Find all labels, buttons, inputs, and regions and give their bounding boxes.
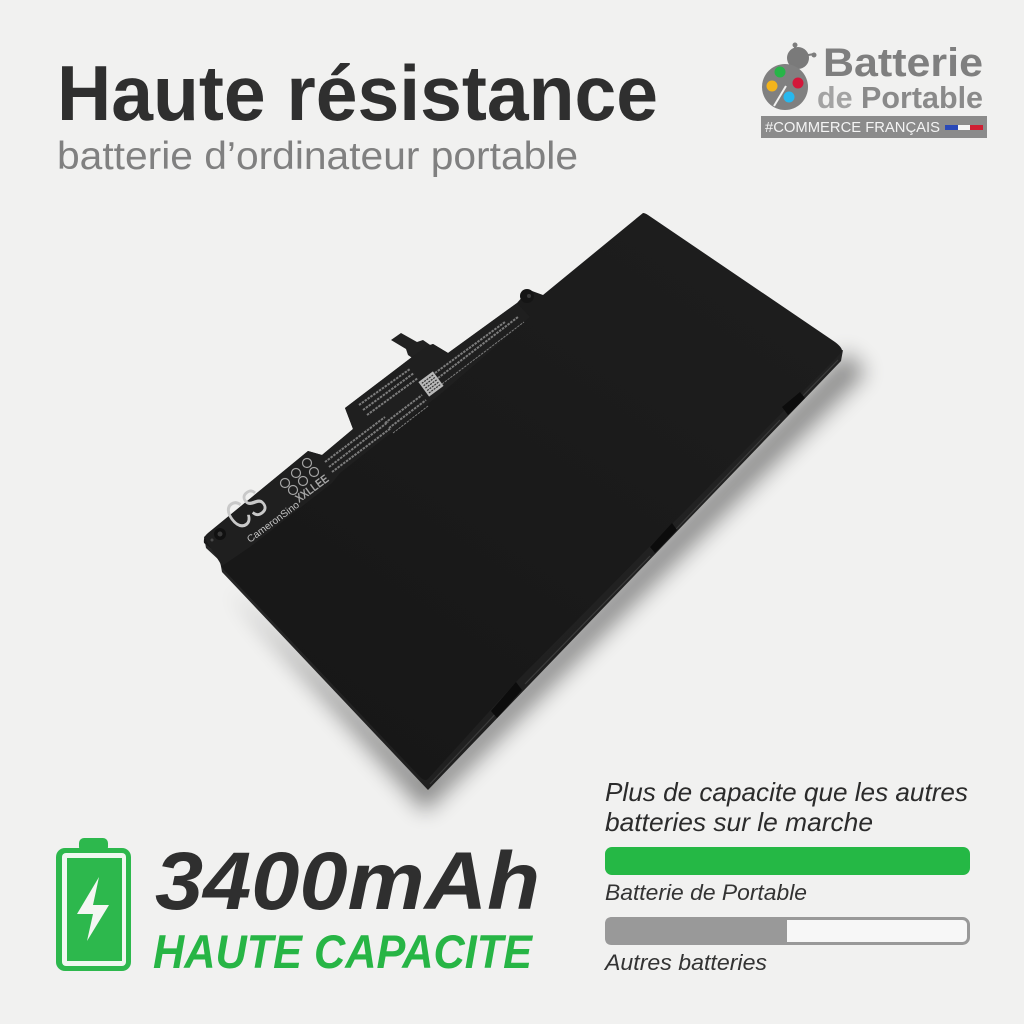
certification marks xyxy=(280,458,318,494)
label strip xyxy=(204,303,530,566)
corner screw lug xyxy=(210,528,226,542)
gray bar xyxy=(605,917,968,945)
battery side wall xyxy=(204,350,843,790)
logo wordmark: Batterie: Batterie xyxy=(823,41,983,85)
comparison heading: batteries sur le marche xyxy=(605,807,873,837)
icon: ladybug palette xyxy=(762,42,816,110)
QR code xyxy=(418,371,444,397)
connector ribbon xyxy=(391,333,436,362)
label print lines xyxy=(325,317,524,472)
logo wordmark: de Portable: de Portable xyxy=(817,80,983,115)
logo band: commerce français: #COMMERCE FRANÇAIS xyxy=(765,119,940,136)
capacity value: 3400mAh xyxy=(155,836,540,927)
CS brand logo: CS xyxy=(217,480,276,539)
battery shadow xyxy=(230,352,866,812)
logo band: commerce français xyxy=(761,116,987,138)
comparison heading: Plus de capacite que les autres xyxy=(605,777,968,807)
tab connector xyxy=(412,344,448,374)
comparison panel xyxy=(603,777,970,975)
battery product photo xyxy=(204,213,866,812)
Cameron Sino brand name: CameronSino xyxy=(245,500,302,545)
logo: Batterie de Portable xyxy=(761,41,987,138)
side wall details xyxy=(430,360,838,784)
side notches xyxy=(491,392,805,718)
green bar label: Batterie de Portable xyxy=(605,880,807,905)
green bar xyxy=(605,847,970,875)
screw lug xyxy=(520,289,534,303)
gray bar label: Autres batteries xyxy=(603,950,767,975)
title: Haute résistance xyxy=(57,49,658,137)
icon: green battery xyxy=(56,838,131,971)
recycling marks: XXLLEE xyxy=(292,472,331,505)
battery top surface xyxy=(204,213,842,780)
subtitle: batterie d’ordinateur portable xyxy=(57,135,578,178)
capacity caption: HAUTE CAPACITE xyxy=(153,925,534,978)
